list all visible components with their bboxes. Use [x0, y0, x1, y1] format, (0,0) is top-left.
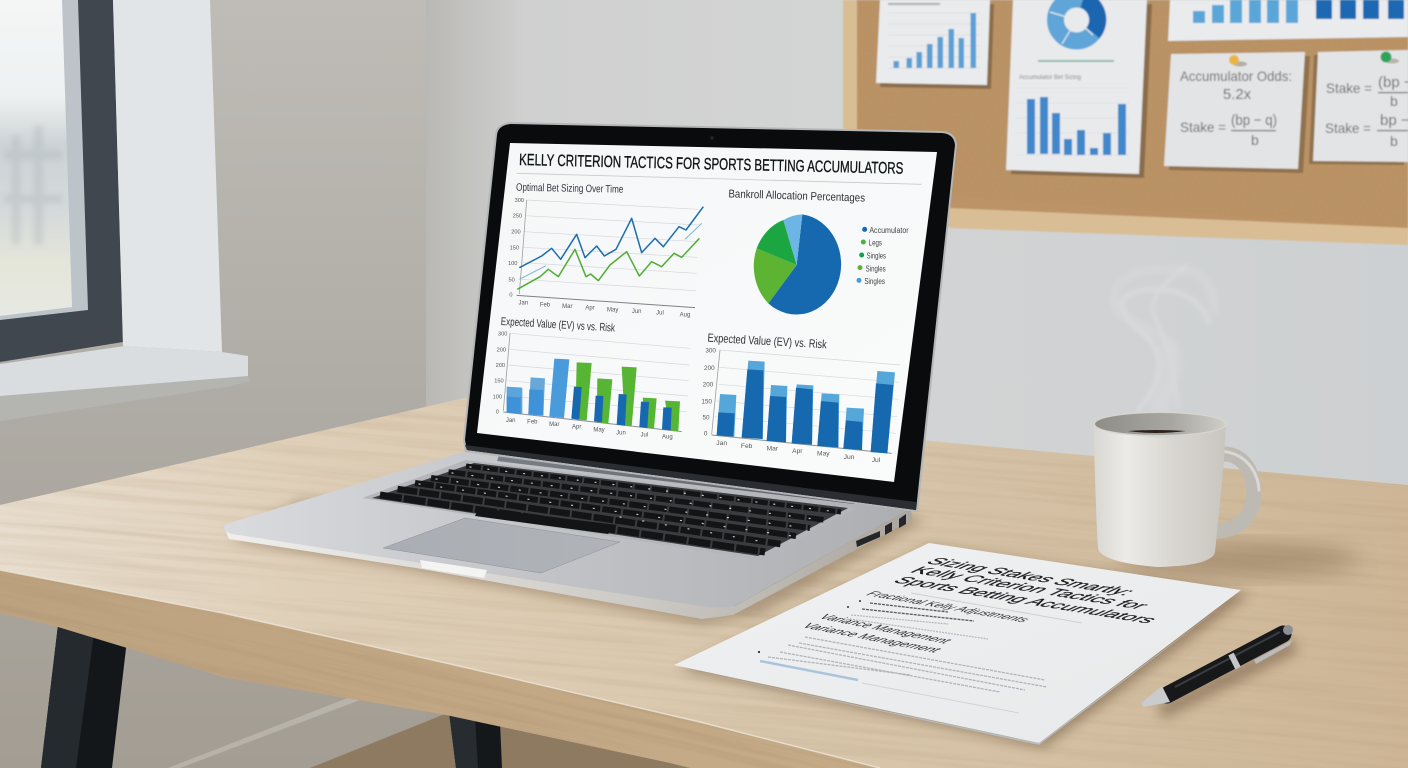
blurred view outside — [4, 125, 62, 245]
paper shadow — [680, 547, 1250, 748]
bar chart: expected value vs risk, left: Apr — [572, 425, 581, 431]
paper sheet — [674, 592, 1241, 745]
line chart: optimal bet sizing: 50 — [509, 277, 515, 283]
bar chart: expected value vs risk, left: Aug — [662, 435, 673, 441]
paper document — [674, 543, 1241, 745]
bar chart: expected value vs risk, left: May — [593, 427, 605, 433]
line chart: optimal bet sizing: 0 — [509, 292, 513, 298]
laptop lid — [463, 122, 957, 512]
pen cap end — [1283, 625, 1293, 635]
coffee — [1128, 430, 1186, 433]
thumb notch — [420, 560, 487, 578]
sticky note: accumulator odds: Stake = — [1180, 119, 1226, 135]
line chart: optimal bet sizing: Jun — [632, 309, 641, 315]
floor — [310, 712, 720, 768]
bar chart: expected value vs risk, left: Jul — [641, 432, 648, 438]
donut — [1050, 0, 1098, 44]
laptop — [224, 122, 957, 619]
laptop shadow — [232, 500, 925, 625]
steam — [1114, 265, 1214, 410]
window sill front face — [0, 376, 250, 421]
window dark frame — [0, 0, 123, 362]
pen barrel — [1167, 634, 1283, 695]
mug rim — [1093, 412, 1227, 436]
bar chart: expected value vs risk, left: Mar — [549, 422, 559, 428]
desk front edge — [0, 570, 880, 768]
bar chart: expected value vs risk, left: 0 — [496, 409, 499, 415]
pen — [1141, 625, 1293, 707]
bar chart: expected value vs risk, left: 150 — [494, 379, 504, 385]
bar chart: expected value vs risk, left: 300 — [498, 332, 507, 338]
line chart heading: Optimal Bet Sizing Over Time — [516, 182, 624, 196]
line chart: optimal bet sizing: Mar — [562, 304, 572, 310]
section: variance management: Variance Management — [797, 622, 945, 654]
pen clip — [1254, 640, 1292, 664]
pinned chart: donut and bars: Accumulator Bet Sizing — [1019, 75, 1081, 81]
line chart: optimal bet sizing: Aug — [680, 312, 690, 318]
bar chart: expected value vs risk, right: Jun — [844, 454, 855, 461]
pen shadow — [1160, 645, 1295, 712]
line chart: optimal bet sizing: 200 — [511, 229, 521, 235]
sticky note: accumulator odds: 5.2x — [1223, 86, 1252, 103]
bar chart: expected value vs risk, right: 200 — [703, 382, 714, 389]
window glass view — [0, 0, 76, 322]
pie legend: Legs — [869, 238, 882, 247]
sticky note: stake formulas: b — [1390, 93, 1398, 109]
keyboard well — [362, 460, 856, 560]
pen tip — [1141, 686, 1170, 707]
space bar — [475, 508, 617, 534]
trackpad — [383, 518, 620, 573]
line chart: optimal bet sizing: 250 — [513, 214, 522, 220]
sticky note: accumulator odds: Accumulator Odds: — [1180, 68, 1292, 84]
laptop base top — [224, 452, 911, 608]
yellow pin — [1229, 55, 1247, 66]
line chart: optimal bet sizing — [508, 182, 703, 318]
dashboard on screen — [493, 151, 922, 464]
window sill — [0, 346, 248, 398]
document title — [887, 556, 1162, 626]
bar chart: expected value vs risk, right: 300 — [705, 348, 716, 355]
back wall — [425, 0, 1408, 520]
laptop base side edge — [224, 508, 912, 619]
window reveal — [113, 0, 222, 352]
left bar chart heading: Expected Value (EV) vs vs. Risk — [500, 316, 616, 335]
sticky note: stake formulas: b — [1390, 133, 1398, 149]
pie legend: Singles — [867, 251, 886, 260]
green pin — [1380, 52, 1399, 64]
bar chart: expected value vs risk, right: Jul — [872, 457, 881, 464]
mug handle — [1208, 454, 1254, 531]
document title: Sizing Stakes Smartly: — [920, 556, 1140, 598]
keyboard — [372, 463, 848, 556]
pinned chart: donut and bars — [1006, 0, 1152, 178]
line chart: optimal bet sizing: Feb — [540, 302, 551, 308]
ports — [856, 514, 906, 547]
line chart: optimal bet sizing: 150 — [510, 245, 519, 251]
board frame — [843, 0, 1408, 245]
mug body — [1093, 423, 1226, 567]
line chart: optimal bet sizing: 300 — [515, 198, 524, 204]
bar chart: expected value vs risk, right — [701, 331, 900, 464]
right bar chart heading: Expected Value (EV) vs. Risk — [707, 331, 828, 351]
pen band — [1231, 654, 1238, 668]
line chart: optimal bet sizing: Jul — [656, 311, 664, 317]
bar chart: expected value vs risk, right: Feb — [741, 443, 753, 450]
wall below desk — [426, 500, 726, 768]
pie chart: bankroll allocation — [728, 188, 909, 315]
bar chart: expected value vs risk, right: Apr — [792, 448, 803, 455]
bar chart: expected value vs risk, left: 200 — [497, 348, 506, 354]
pie legend: Singles — [866, 264, 886, 273]
section: variance management — [758, 613, 1047, 713]
bar chart: expected value vs risk, right: Mar — [767, 446, 779, 453]
document title: Sports Betting Accumulators — [887, 575, 1162, 626]
sticky note: stake formulas: Stake = — [1325, 120, 1371, 136]
line chart: optimal bet sizing: 100 — [508, 261, 517, 267]
cork surface — [857, 0, 1408, 228]
line chart: optimal bet sizing: Apr — [585, 306, 595, 312]
document title: Kelly Criterion Tactics for — [904, 565, 1154, 611]
green series — [517, 238, 699, 289]
left wall — [0, 0, 426, 768]
bar chart: expected value vs risk, left: 200 — [496, 363, 505, 369]
pie heading: Bankroll Allocation Percentages — [728, 188, 865, 205]
sticky note: accumulator odds — [1164, 52, 1310, 173]
cork board — [843, 0, 1408, 245]
desk back leg — [449, 712, 502, 768]
pie legend: Accumulator — [869, 226, 909, 235]
pie legend: Singles — [864, 277, 885, 286]
window — [0, 0, 250, 421]
desk left leg — [41, 625, 127, 768]
skirting board — [168, 690, 376, 768]
section: fractional Kelly — [847, 590, 1034, 639]
coffee mug — [1093, 412, 1259, 567]
sticky note: stake formulas — [1309, 50, 1408, 165]
blue series — [519, 207, 703, 268]
bar chart: expected value vs risk, right: 150 — [701, 398, 712, 405]
hinge — [497, 450, 865, 504]
window inner pale frame — [0, 0, 89, 322]
line chart: optimal bet sizing: May — [607, 307, 618, 313]
sticky note: accumulator odds: (bp − q) — [1231, 112, 1277, 129]
bar chart: expected value vs risk, right: Jan — [716, 440, 727, 447]
dashboard title: KELLY CRITERION TACTICS FOR SPORTS BETTING ACCUMULATORS — [519, 151, 904, 178]
line chart: optimal bet sizing: Jan — [519, 301, 528, 307]
pale series — [519, 223, 702, 279]
laptop screen — [477, 143, 937, 482]
bar chart: expected value vs risk, left: Jan — [506, 418, 515, 424]
bar chart: expected value vs risk, left — [493, 316, 690, 441]
desk top — [0, 398, 1408, 768]
bar chart: expected value vs risk, left: 100 — [493, 394, 502, 400]
bar chart: expected value vs risk, right: 0 — [704, 431, 708, 438]
bar chart: expected value vs risk, right: May — [817, 451, 830, 458]
section: fractional Kelly: Fractional Kelly Adjustments — [862, 590, 1034, 624]
pinned chart: rising bars — [876, 0, 994, 89]
camera — [710, 136, 714, 140]
bar chart: expected value vs risk, left: Feb — [527, 420, 538, 426]
sticky note: stake formulas: Stake = — [1326, 80, 1372, 96]
section: variance management: Variance Management — [814, 613, 956, 645]
sticky note: accumulator odds: b — [1251, 132, 1259, 148]
mug shadow — [1120, 544, 1360, 576]
bar chart: expected value vs risk, right: 50 — [702, 414, 710, 421]
bar chart: expected value vs risk, right: 200 — [704, 365, 715, 372]
bar chart: expected value vs risk, left: Jun — [616, 430, 626, 436]
pie legend — [856, 226, 909, 286]
pinned chart strip — [1168, 0, 1408, 41]
